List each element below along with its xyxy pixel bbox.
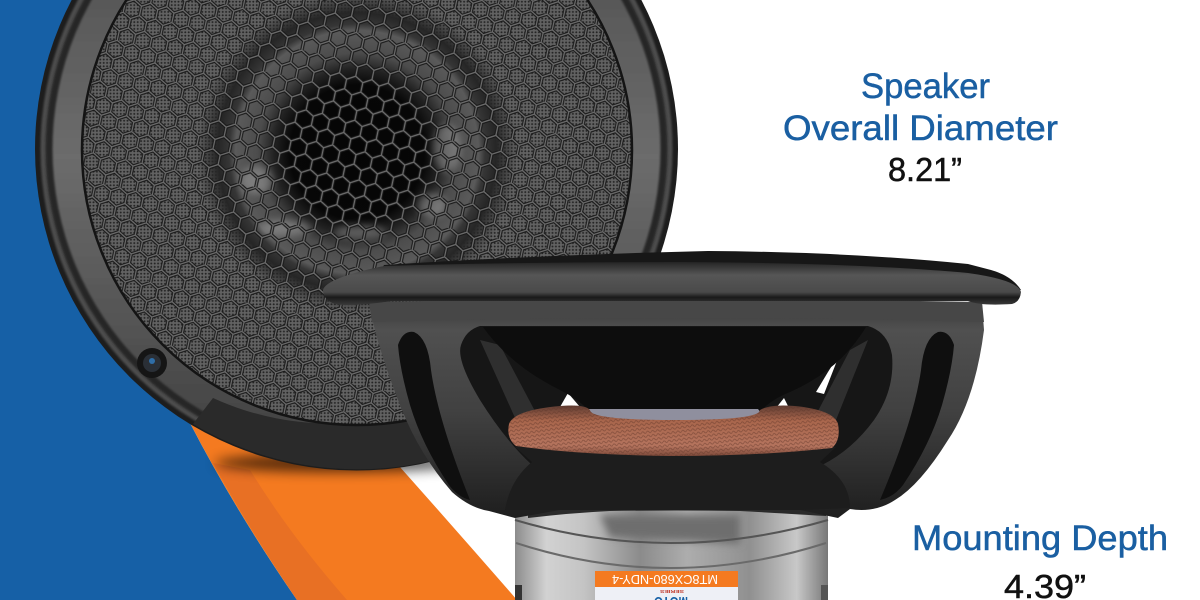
background: blue swoosh: [0, 0, 300, 600]
magnet: chrome cylinder: [515, 508, 828, 600]
text block: speaker overall diameter: Speaker: [861, 67, 990, 106]
dark lower trim segment: [193, 385, 500, 469]
dark dome above magnet: [528, 490, 826, 518]
white gaps through window: [816, 353, 840, 394]
cone highlights: [241, 124, 461, 239]
shadow under front speaker: [215, 454, 465, 472]
text block: mounting depth: Mounting Depth: [912, 519, 1168, 558]
text block: speaker overall diameter: [783, 67, 1058, 188]
central cone: [197, 0, 517, 312]
darker orange band: [213, 463, 347, 600]
grille: [83, 0, 631, 424]
side-view speaker: [323, 251, 1021, 600]
central window: [460, 326, 892, 465]
basket top band: [369, 299, 984, 322]
honeycomb frame: [83, 0, 631, 424]
background: orange swoosh: [190, 300, 517, 600]
inner spoke left: [480, 340, 545, 440]
magnet label: MT8CX680-NDY-4: [612, 572, 718, 587]
lower basket plate: [505, 447, 850, 510]
flange rim: [323, 262, 1021, 305]
flange top foam: [370, 251, 1021, 290]
right slot: [880, 332, 954, 500]
front-view speaker with honeycomb grille: [35, 0, 678, 470]
magnet label: [595, 571, 738, 600]
text block: speaker overall diameter: 8.21”: [888, 151, 962, 188]
black cone: [483, 327, 866, 412]
magnet label: SERIES: [660, 589, 684, 594]
lavender voice coil collar: [584, 409, 765, 422]
copper spider ring: [508, 406, 839, 456]
outer rim: [35, 0, 678, 470]
inner spoke right: [808, 340, 868, 440]
text block: mounting depth: [912, 519, 1168, 600]
text block: speaker overall diameter: Overall Diameter: [783, 109, 1058, 148]
mounting screw: [137, 348, 167, 378]
basket frame: [369, 304, 984, 518]
left slot: [398, 332, 470, 500]
